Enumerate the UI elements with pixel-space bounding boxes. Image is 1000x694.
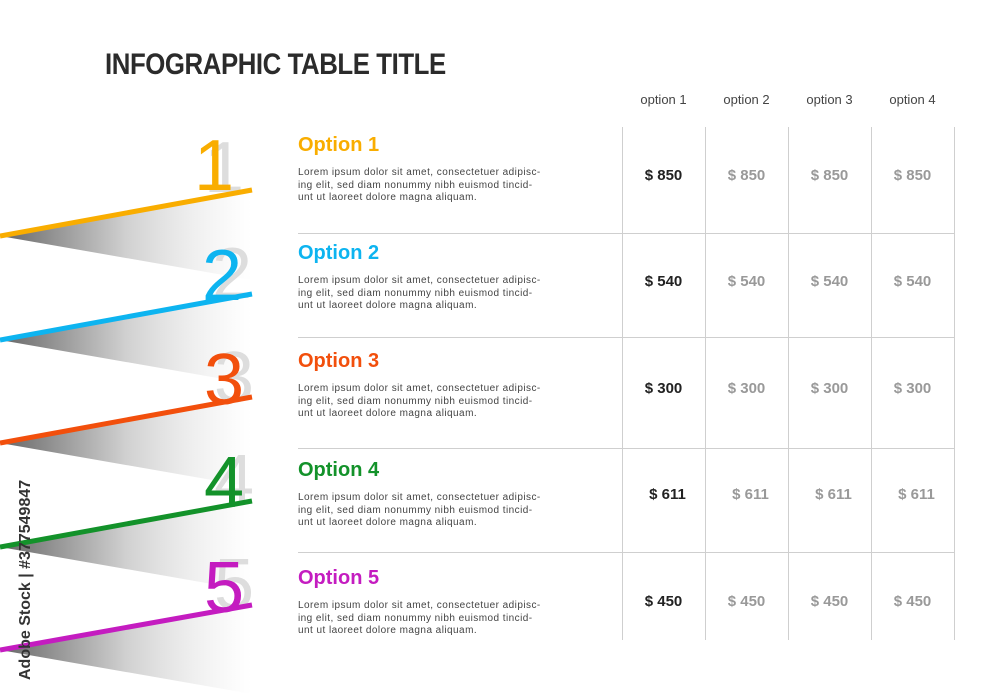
text: $ 611 xyxy=(815,486,852,503)
stripe 5: 5 xyxy=(204,548,244,628)
text: $ 540 xyxy=(894,273,931,290)
option 2: Lorem ipsum dolor sit amet, consectetuer adipisc- xyxy=(298,275,541,286)
option 3: Lorem ipsum dolor sit amet, consectetuer adipisc- xyxy=(298,383,541,394)
option 4: Lorem ipsum dolor sit amet, consectetuer adipisc- xyxy=(298,492,541,503)
stripe 3 xyxy=(0,338,254,487)
stripe 4: 4 xyxy=(214,441,254,521)
text: $ 450 xyxy=(894,593,931,610)
text: $ 850 xyxy=(728,167,765,184)
text: $ 300 xyxy=(645,380,682,397)
option 5: Lorem ipsum dolor sit amet, consectetuer adipisc- xyxy=(298,600,541,611)
stripe 5 xyxy=(0,545,254,694)
stripe 3: 3 xyxy=(214,338,254,418)
option 5 xyxy=(298,567,541,636)
text: option 4 xyxy=(889,92,936,107)
option 1: Option 1 xyxy=(298,134,379,156)
grid lines xyxy=(298,127,954,640)
option 3: Option 3 xyxy=(298,350,379,372)
text: $ 611 xyxy=(649,486,686,503)
text: $ 540 xyxy=(645,273,682,290)
stripe 4 xyxy=(0,441,254,591)
stripe 1 xyxy=(0,126,252,280)
text: $ 300 xyxy=(894,380,931,397)
prices xyxy=(645,167,935,610)
option 3 xyxy=(298,350,541,419)
stripe 2: 2 xyxy=(212,234,252,314)
option 1: ing elit, sed diam nonummy nibh euismod tincid- xyxy=(298,180,533,190)
text: option 3 xyxy=(806,92,853,107)
text: option 1 xyxy=(640,92,687,107)
column headers xyxy=(640,92,936,107)
text: $ 540 xyxy=(728,273,765,290)
stripe 5: 5 xyxy=(214,545,254,625)
option 4 xyxy=(298,459,541,528)
option 2 xyxy=(298,242,541,311)
text: $ 850 xyxy=(894,167,931,184)
watermark side text: Adobe Stock | #377549847 xyxy=(17,480,34,680)
text: $ 611 xyxy=(898,486,935,503)
text: $ 850 xyxy=(645,167,682,184)
stripe 3: 3 xyxy=(204,340,244,420)
stripe 1: 1 xyxy=(204,128,244,208)
option 1 xyxy=(298,134,541,203)
stripe 4: 4 xyxy=(204,443,244,523)
text: $ 450 xyxy=(645,593,682,610)
option 5: Option 5 xyxy=(298,567,379,589)
text: $ 611 xyxy=(732,486,769,503)
option 5: ing elit, sed diam nonummy nibh euismod tincid- xyxy=(298,612,533,624)
stripe 1: 1 xyxy=(194,126,234,206)
option 1: unt ut laoreet dolore magna aliquam. xyxy=(298,192,477,203)
option 4: Option 4 xyxy=(298,459,379,481)
option 1: Lorem ipsum dolor sit amet, consectetuer adipisc- xyxy=(298,167,541,178)
option 2: unt ut laoreet dolore magna aliquam. xyxy=(298,300,477,311)
option 5: unt ut laoreet dolore magna aliquam. xyxy=(298,625,477,636)
text: $ 450 xyxy=(728,593,765,610)
title: INFOGRAPHIC TABLE TITLE xyxy=(105,48,446,81)
option 3: unt ut laoreet dolore magna aliquam. xyxy=(298,408,477,419)
text: $ 300 xyxy=(811,380,848,397)
option 4: unt ut laoreet dolore magna aliquam. xyxy=(298,517,477,528)
option 2: Option 2 xyxy=(298,242,379,264)
stripe 2 xyxy=(0,234,252,384)
option 3: ing elit, sed diam nonummy nibh euismod tincid- xyxy=(298,396,533,406)
stripe 2: 2 xyxy=(202,236,242,316)
text: $ 540 xyxy=(811,273,848,290)
text: option 2 xyxy=(723,92,770,107)
text: $ 300 xyxy=(728,380,765,397)
option 4: ing elit, sed diam nonummy nibh euismod tincid- xyxy=(298,504,533,516)
text: $ 850 xyxy=(811,167,848,184)
option 2: ing elit, sed diam nonummy nibh euismod tincid- xyxy=(298,288,533,298)
text: $ 450 xyxy=(811,593,848,610)
